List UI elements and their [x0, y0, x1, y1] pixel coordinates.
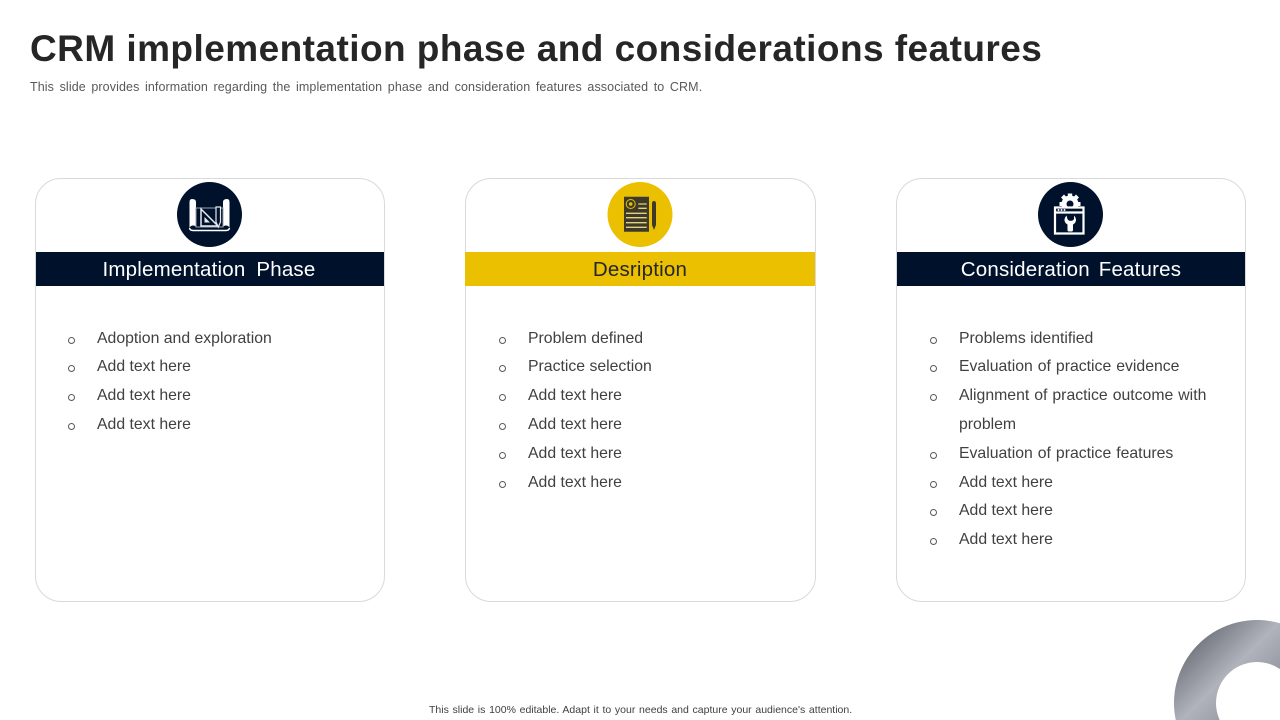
list: consideration features: Evaluation of practice evidence: [959, 358, 1179, 375]
heading: consideration features: Consideration Features: [961, 258, 1181, 281]
list: consideration features: Evaluation of practice features: [959, 445, 1173, 462]
icon: gear and wrench window: [1038, 182, 1103, 247]
list: description: Problem defined: [528, 330, 643, 347]
list: consideration features: Add text here: [959, 502, 1053, 519]
list: consideration features: [930, 330, 1206, 548]
list: implementation phase: Add text here: [97, 358, 191, 375]
list: description: Add text here: [528, 474, 622, 491]
title: CRM implementation phase and considerations features: [30, 28, 1042, 69]
list: consideration features: Add text here: [959, 531, 1053, 548]
list: consideration features: Alignment of practice outcome with: [959, 387, 1206, 404]
heading: implementation phase: [36, 252, 384, 286]
panel: consideration features: [896, 178, 1246, 602]
icon: blueprint: [177, 182, 242, 247]
list: implementation phase: Add text here: [97, 416, 191, 433]
heading: description: Desription: [593, 258, 687, 281]
decorative ring: [1174, 620, 1280, 720]
list: description: [499, 330, 652, 491]
list: description: Add text here: [528, 445, 622, 462]
subtitle: This slide provides information regarding the implementation phase and consideration features associated to CRM.: [30, 80, 702, 94]
list: consideration features: Add text here: [959, 474, 1053, 491]
list: implementation phase: Adoption and exploration: [97, 330, 272, 347]
footer note: This slide is 100% editable. Adapt it to your needs and capture your audience's attention.: [429, 704, 852, 716]
list: implementation phase: Add text here: [97, 387, 191, 404]
list: consideration features: Problems identified: [959, 330, 1093, 347]
heading: implementation phase: Implementation Phase: [102, 258, 315, 281]
list: implementation phase: [68, 330, 272, 433]
heading: description: [465, 252, 815, 286]
list: description: Add text here: [528, 416, 622, 433]
list: description: Add text here: [528, 387, 622, 404]
panel: implementation phase: [35, 178, 385, 602]
list: description: Practice selection: [528, 358, 652, 375]
list: consideration features: problem: [959, 416, 1016, 433]
panel: description: [465, 178, 816, 602]
icon: document and pen: [608, 182, 672, 247]
heading: consideration features: [897, 252, 1245, 286]
